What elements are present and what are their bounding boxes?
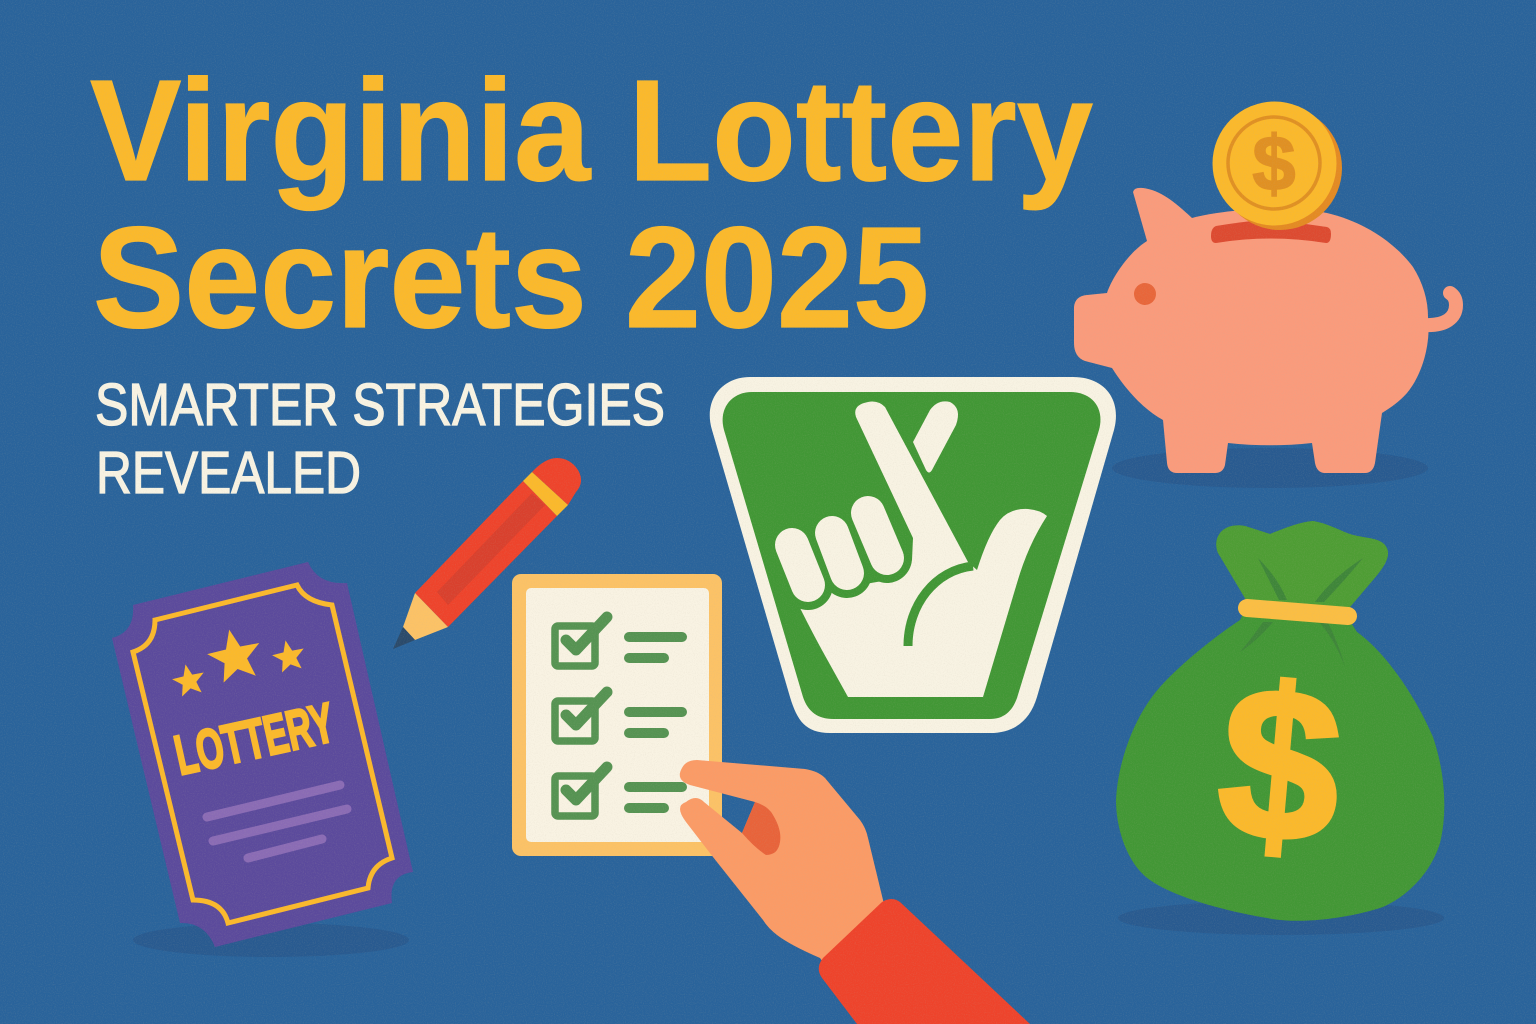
hand palm and index finger bbox=[800, 402, 1047, 697]
icon: hand holding checklist bbox=[680, 760, 1030, 1024]
dollar sign: $ bbox=[1210, 639, 1350, 890]
checklist item 1 bbox=[555, 617, 682, 666]
thumb crease bbox=[908, 566, 973, 646]
eye bbox=[1134, 283, 1156, 305]
thumb web shadow bbox=[742, 802, 780, 855]
stars bbox=[170, 624, 308, 698]
subtitle bbox=[95, 372, 665, 506]
icon: piggy bank with coin bbox=[1074, 102, 1456, 488]
subtitle: SMARTER STRATEGIES bbox=[95, 372, 665, 438]
icon: checklist bbox=[512, 574, 722, 856]
checklist item 2 bbox=[555, 692, 682, 741]
ticket border bbox=[133, 585, 392, 923]
icon: money bag bbox=[1116, 521, 1444, 935]
crossed finger tip bbox=[913, 401, 958, 472]
sleeve bbox=[819, 899, 1030, 1024]
band bbox=[1247, 608, 1348, 616]
title bbox=[90, 50, 1093, 358]
slot bbox=[1211, 219, 1331, 243]
coin: $ bbox=[1252, 119, 1296, 207]
folds bbox=[1240, 558, 1363, 667]
icon: Virginia Lottery crossed fingers badge bbox=[710, 377, 1116, 733]
ticket label: LOTTERY bbox=[169, 690, 340, 787]
coin bbox=[1212, 102, 1342, 230]
title: Secrets 2025 bbox=[93, 197, 929, 358]
ticket lines bbox=[207, 785, 347, 858]
icon: pencil bbox=[393, 458, 581, 649]
title: Virginia Lottery bbox=[90, 50, 1093, 211]
subtitle: REVEALED bbox=[96, 440, 361, 506]
icon: lottery ticket bbox=[112, 562, 413, 957]
curled fingers bbox=[792, 513, 887, 585]
checklist item 3 bbox=[555, 767, 682, 816]
